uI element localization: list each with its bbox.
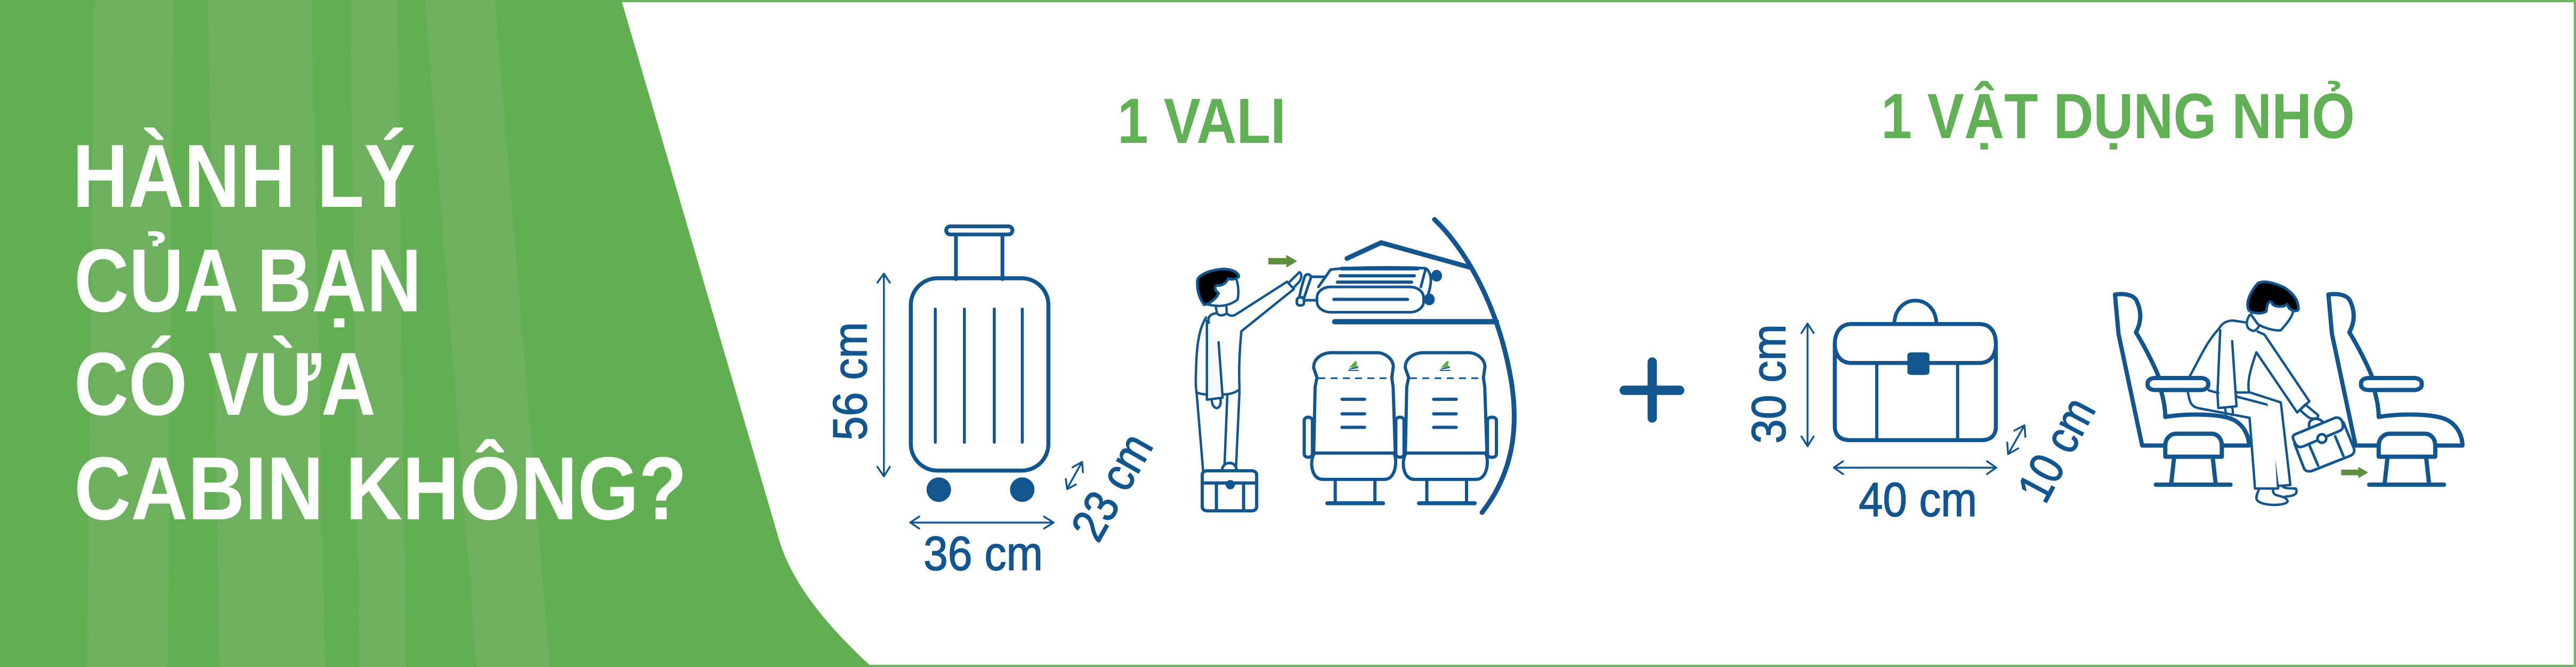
- icon: overhead bin and fuselage: [1335, 220, 1514, 512]
- heading: 1 vat dung nho: 1 VẬT DỤNG NHỎ: [1881, 80, 2355, 152]
- arrow: green arrow under seat: [2341, 467, 2368, 478]
- title: [72, 126, 687, 539]
- label: 56 cm: 56 cm: [824, 322, 877, 440]
- icon: seat right: [1403, 353, 1496, 503]
- icon: bag in hand: [2293, 417, 2354, 471]
- label: 30 cm: 30 cm: [1743, 324, 1796, 444]
- arrow: suitcase height: [877, 274, 890, 476]
- title: HÀNH LÝ: [72, 126, 416, 226]
- panel: green title banner: [0, 0, 872, 667]
- icon: aisle seat right: [2328, 294, 2462, 485]
- arrow: suitcase depth: [1066, 462, 1083, 489]
- icon: bag at feet: [1202, 463, 1257, 511]
- heading: 1 vali: 1 VALI: [1117, 85, 1286, 157]
- icon: seat left: [1304, 353, 1404, 503]
- label: 10 cm: 10 cm: [2007, 389, 2106, 510]
- arrow: suitcase width: [910, 517, 1054, 528]
- arrow: green arrow towards bin: [1268, 255, 1297, 268]
- logo: [1348, 361, 1358, 371]
- title: CỦA BẠN: [74, 230, 422, 331]
- arrow: bag height: [1801, 324, 1813, 446]
- icon: aisle seat left: [2115, 294, 2249, 485]
- label: 40 cm: 40 cm: [1859, 473, 1977, 527]
- icon: small bag: [1835, 301, 1996, 440]
- title: CABIN KHÔNG?: [74, 438, 687, 539]
- icon: suitcase: [911, 226, 1048, 502]
- logo: [1440, 361, 1450, 371]
- label: 36 cm: 36 cm: [924, 527, 1043, 581]
- label: 23 cm: 23 cm: [1061, 424, 1163, 550]
- icon: person lifting suitcase: [1196, 269, 1301, 511]
- arrow: bag width: [1834, 461, 1996, 474]
- title: CÓ VỪA: [74, 334, 376, 434]
- icon: plus sign: [1624, 362, 1680, 418]
- icon: suitcase in overhead bin: [1297, 268, 1442, 312]
- icon: seated person with bag: [2188, 282, 2354, 505]
- arrow: bag depth: [2007, 425, 2026, 454]
